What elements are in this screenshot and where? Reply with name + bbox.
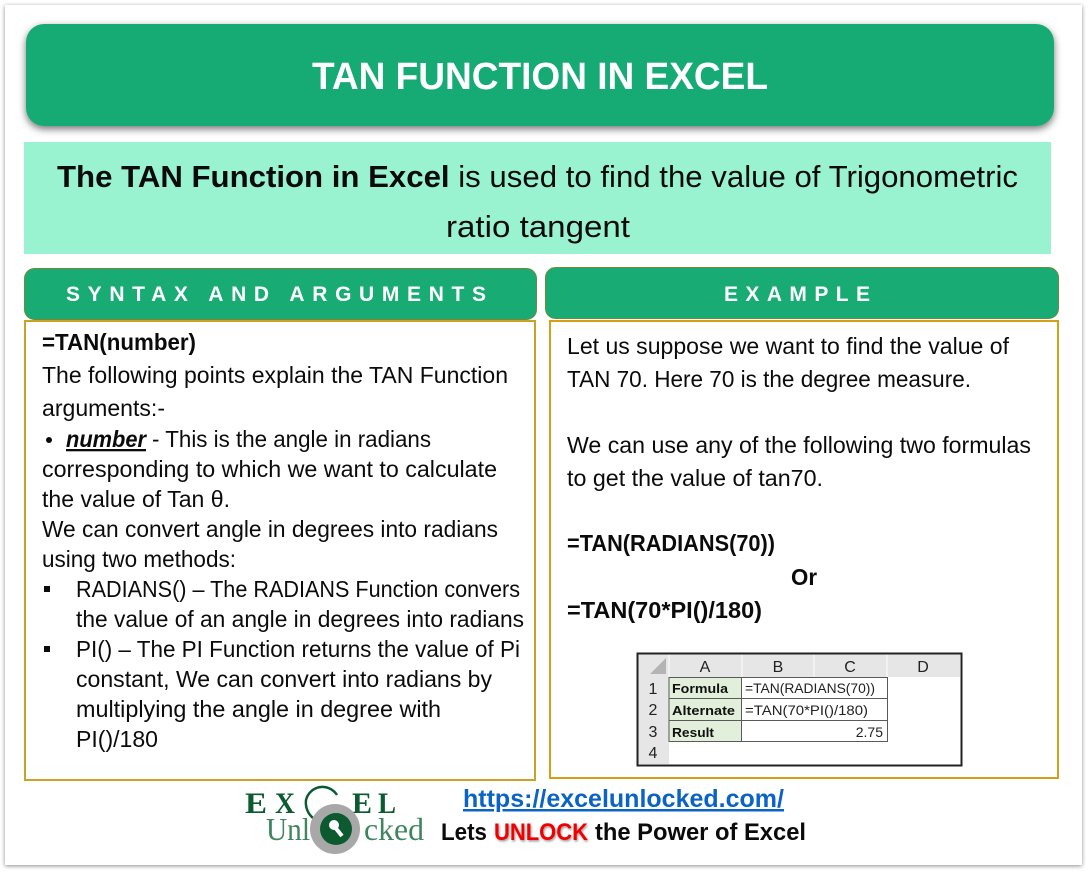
conversion note: We can convert angle in degrees into radians: [42, 516, 498, 542]
spreadsheet screenshot: 2.75: [856, 724, 883, 740]
conversion note: using two methods:: [42, 546, 236, 572]
method: pi: constant, We can convert into radians by: [76, 666, 493, 692]
heading: syntax and arguments: [24, 268, 536, 320]
argument: number: number: [66, 426, 147, 452]
heading: example: [546, 268, 1058, 318]
tagline: the Power of Excel: [595, 819, 806, 846]
spreadsheet screenshot: B: [773, 659, 783, 676]
spreadsheet screenshot: [637, 653, 962, 766]
argument: number: corresponding to which we want to calculate: [42, 456, 497, 482]
logo: excel unlocked: Unl: [266, 811, 310, 847]
title banner: TAN FUNCTION IN EXCEL: [312, 56, 768, 98]
tagline: UNLOCK: [494, 819, 589, 846]
title banner: [26, 24, 1054, 126]
method: pi: PI() – The PI Function returns the value of Pi: [76, 636, 520, 662]
spreadsheet screenshot: =TAN(RADIANS(70)): [745, 680, 875, 696]
method: pi: PI()/180: [76, 726, 158, 752]
example intro: [567, 333, 1010, 392]
method: radians: RADIANS() – The RADIANS Function convers: [76, 576, 520, 602]
panel: syntax and arguments: [25, 321, 535, 780]
example explanation: to get the value of tan70.: [567, 465, 823, 491]
spreadsheet screenshot: Formula: [672, 681, 729, 696]
spreadsheet screenshot: 4: [649, 745, 658, 762]
spreadsheet screenshot: =TAN(70*PI()/180): [745, 702, 868, 718]
spreadsheet screenshot: 1: [649, 681, 658, 698]
argument: number: - This is the angle in radians: [152, 426, 431, 452]
intro text: The following points explain the TAN Function: [42, 362, 508, 388]
intro text: [42, 362, 508, 421]
definition band: ratio tangent: [446, 209, 630, 244]
intro text: arguments:-: [42, 395, 165, 421]
conversion note: [42, 516, 498, 572]
spreadsheet screenshot: 2: [649, 702, 658, 719]
logo: excel unlocked: [245, 787, 424, 854]
example formulas: =TAN(RADIANS(70)): [567, 530, 775, 556]
method: radians: [44, 576, 524, 632]
logo: excel unlocked: E: [245, 787, 267, 820]
example explanation: We can use any of the following two formulas: [567, 432, 1031, 458]
spreadsheet screenshot: Result: [672, 725, 715, 740]
syntax formula: =TAN(number): [42, 329, 196, 355]
method: pi: multiplying the angle in degree with: [76, 696, 441, 722]
spreadsheet screenshot: D: [917, 659, 929, 676]
logo: excel unlocked: L: [378, 787, 396, 820]
example formulas: Or: [791, 564, 817, 590]
logo: excel unlocked: cked: [364, 811, 424, 847]
example formulas: [567, 530, 817, 623]
spreadsheet screenshot: Alternate: [672, 703, 735, 718]
panel: example: [550, 321, 1058, 778]
heading: example: EXAMPLE: [724, 283, 870, 306]
heading: syntax and arguments: SYNTAX AND ARGUMENTS: [66, 283, 486, 306]
definition band: The TAN Function in Excel is used to find the value of Trigonometric: [57, 159, 1018, 194]
example formulas: =TAN(70*PI()/180): [567, 597, 762, 623]
example intro: TAN 70. Here 70 is the degree measure.: [567, 366, 971, 392]
example explanation: [567, 432, 1031, 491]
method: radians: the value of an angle in degrees into radians: [76, 606, 524, 632]
tagline: [441, 819, 806, 846]
logo: excel unlocked: X: [275, 787, 295, 820]
argument: number: the value of Tan θ.: [42, 486, 230, 512]
spreadsheet screenshot: A: [700, 659, 711, 676]
method: pi: [44, 636, 520, 752]
logo: excel unlocked: E: [352, 787, 372, 820]
definition band: [24, 142, 1051, 254]
example intro: Let us suppose we want to find the value of: [567, 333, 1010, 359]
spreadsheet screenshot: 3: [649, 724, 658, 741]
website link: https://excelunlocked.com/: [463, 785, 784, 813]
spreadsheet screenshot: C: [844, 659, 856, 676]
argument: number: [42, 426, 497, 512]
tagline: Lets: [441, 819, 487, 846]
